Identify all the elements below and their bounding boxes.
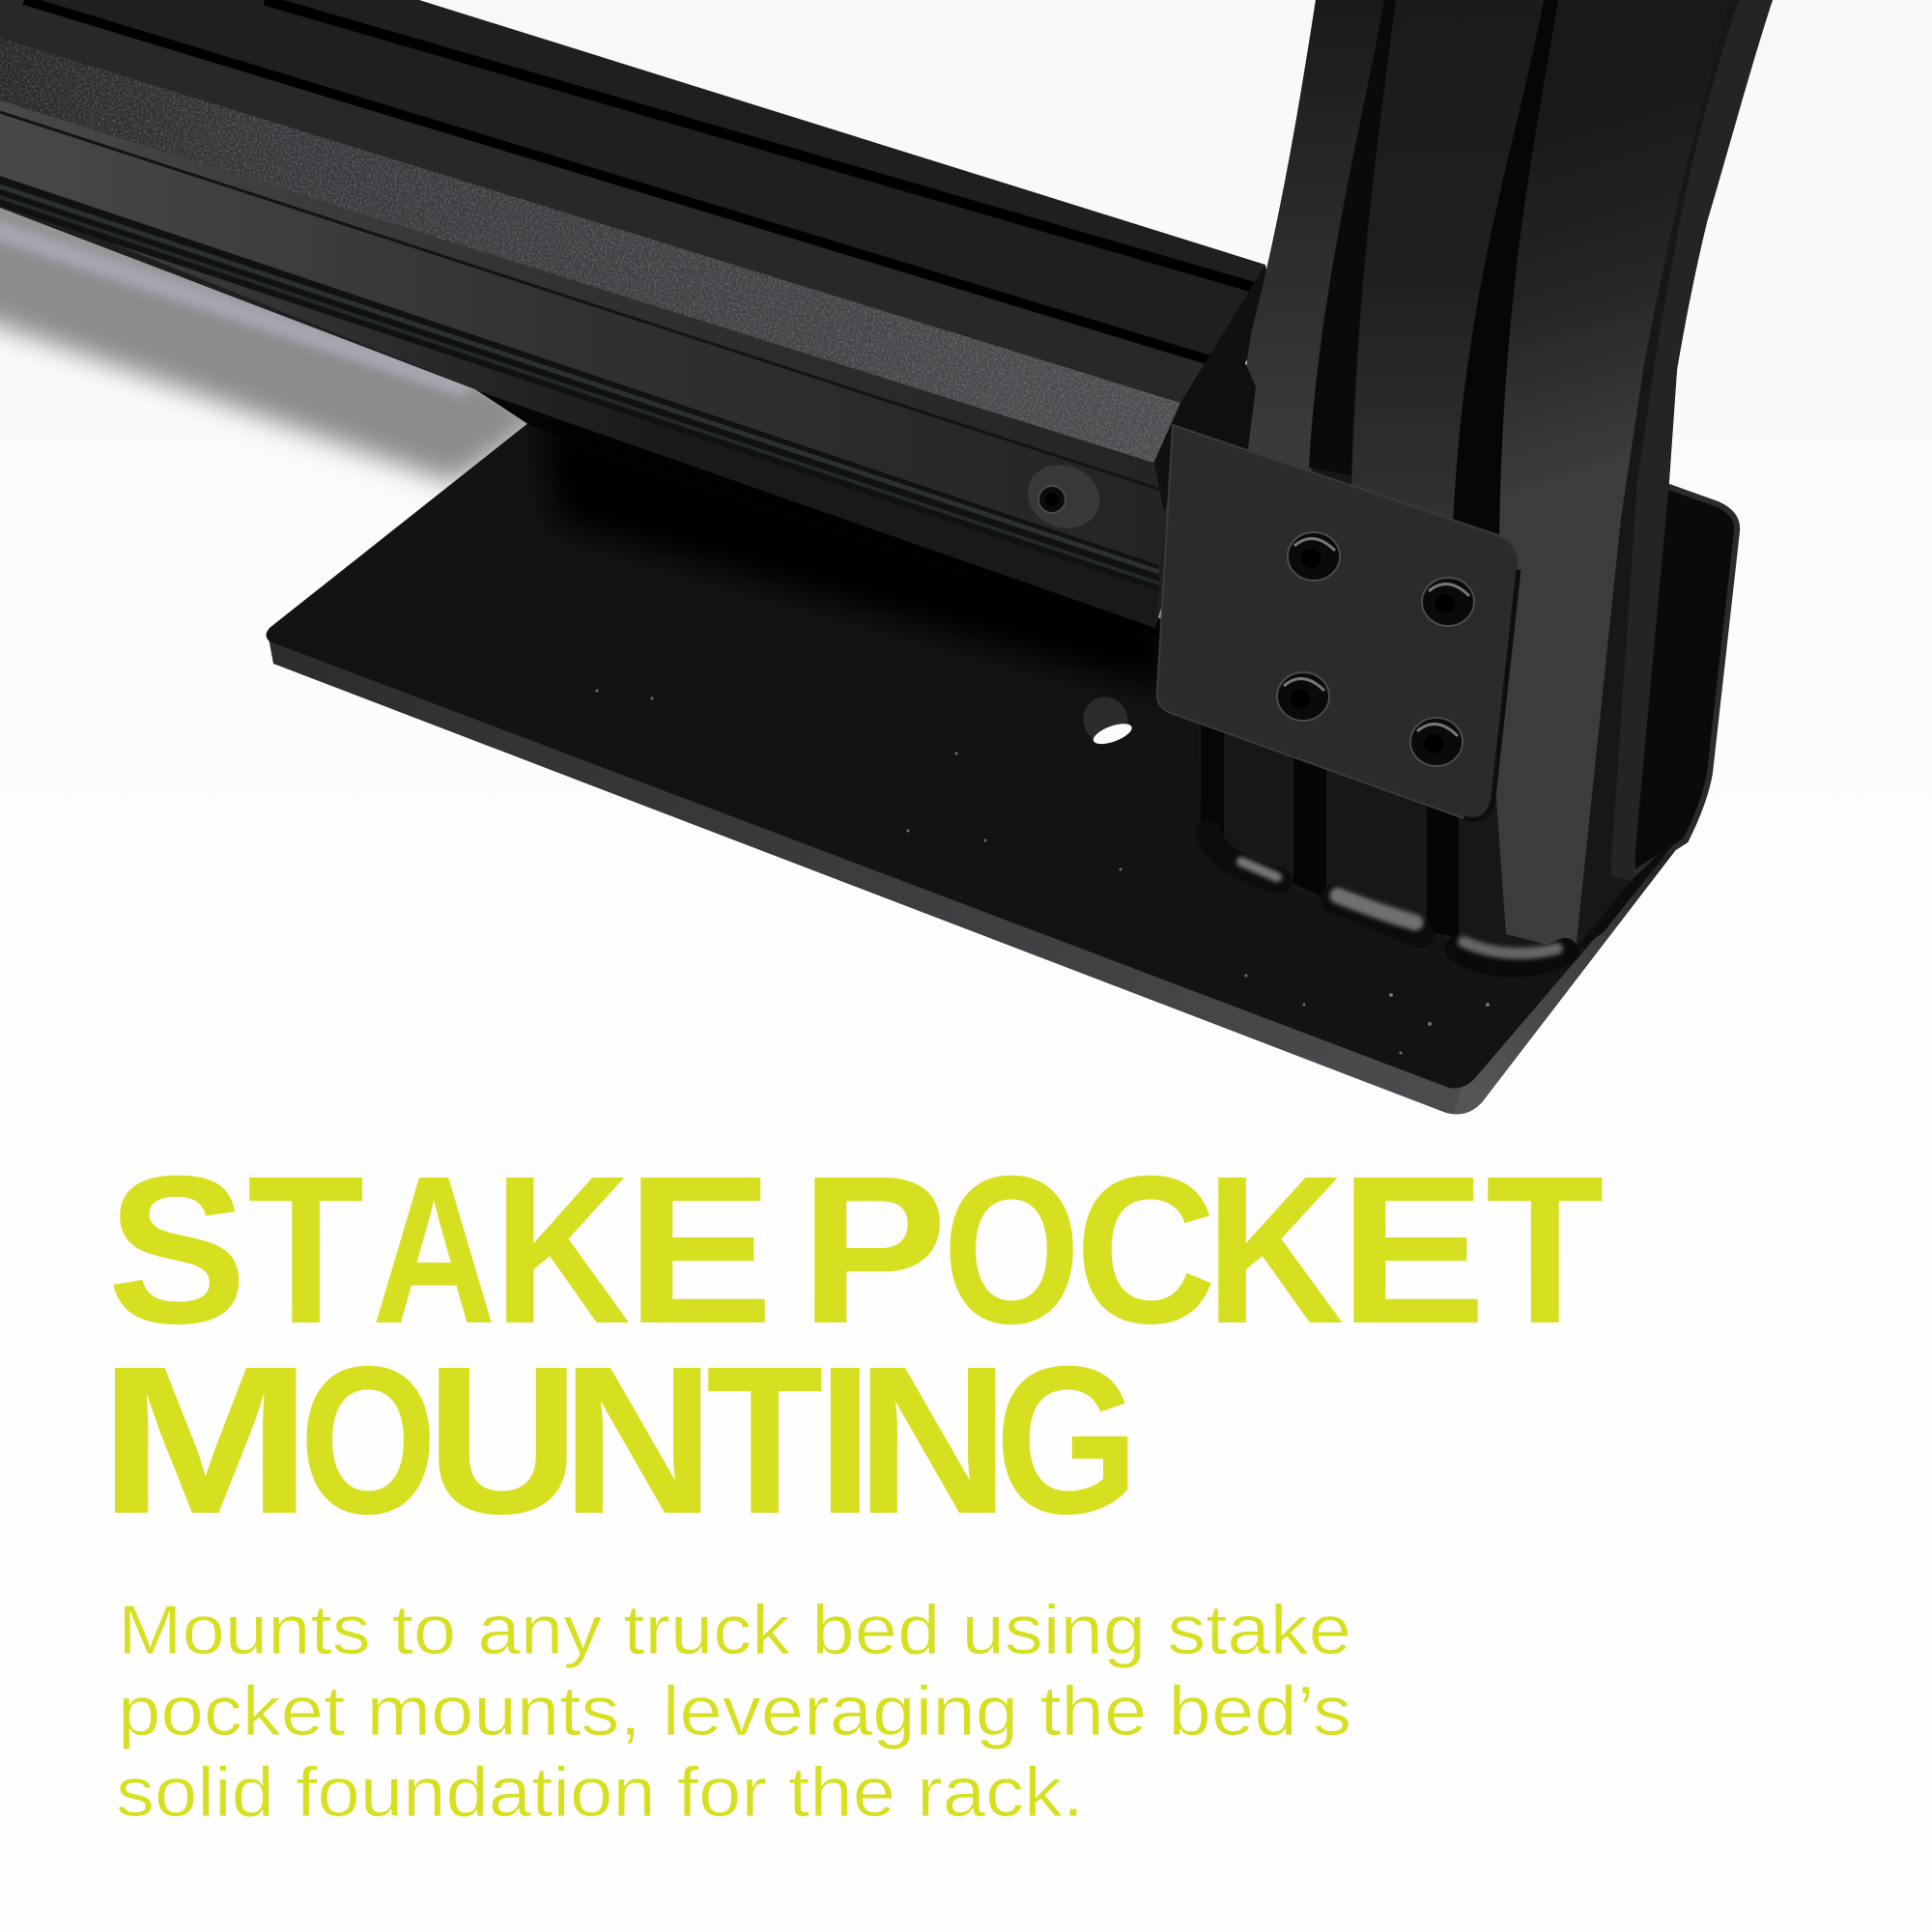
corner bracket plate [1157,348,1519,819]
body text [116,1592,1351,1832]
front strip [1488,0,1729,952]
textured band [0,38,1180,463]
weld beads [1208,833,1565,964]
title line 2 [98,1322,1139,1558]
title: stake pocket mounting [98,1131,1605,1558]
lower groove [0,176,1159,628]
title line 2: U [426,1323,580,1558]
title line 1: K [1206,1132,1344,1368]
plate edge thickness [268,633,1690,1115]
right tube [1610,0,1773,882]
first slot [1309,0,1396,475]
title line 1: S [107,1133,247,1368]
body text: solid foundation for the rack. [116,1754,1084,1832]
middle strip [1351,0,1544,541]
title line 2: N [561,1323,715,1558]
title line 2: T [706,1322,823,1558]
bolt 4 [1410,718,1463,766]
title line 1: A [372,1133,496,1368]
rail end joint [1154,265,1275,512]
title line 1 [107,1131,1605,1368]
lower rail face [0,100,1174,570]
side bolt [1018,455,1109,538]
rear vertical flange [1570,486,1737,956]
horizontal rail extrusion [0,0,1275,628]
plate specks [595,690,1490,1055]
plate top surface [267,422,1689,1089]
photo: stake pocket mount and rack upright [0,0,1773,1115]
keyhole slot [1077,691,1134,750]
upright arch column [1198,0,1773,959]
bolt 3 [1277,672,1329,721]
body text: pocket mounts, leveraging the bed’s [118,1673,1351,1750]
title line 2: I [817,1323,873,1558]
body text: Mounts to any truck bed using stake [118,1592,1351,1669]
title line 1: K [494,1131,631,1367]
title line 1: P [800,1133,948,1368]
title line 2: G [995,1322,1139,1558]
bolt 1 [1288,532,1340,581]
title line 2: M [98,1322,313,1557]
title line 1: T [247,1132,364,1368]
title line 1: E [1339,1133,1487,1368]
title line 1: E [626,1133,774,1368]
lower posts [1201,715,1224,850]
title line 1: O [943,1132,1080,1368]
second slot [1453,0,1558,546]
title line 2: N [856,1323,1009,1558]
title line 1: T [1486,1132,1605,1368]
top slot [265,0,1256,288]
left strip [1219,0,1396,483]
floor shadow under rail [0,145,541,483]
second slot [24,0,1226,365]
base plate [267,422,1690,1115]
bolt 2 [1422,578,1474,626]
title line 1: C [1075,1131,1216,1368]
title line 2: O [299,1322,437,1558]
deep shadow under rail on plate [464,382,1164,691]
